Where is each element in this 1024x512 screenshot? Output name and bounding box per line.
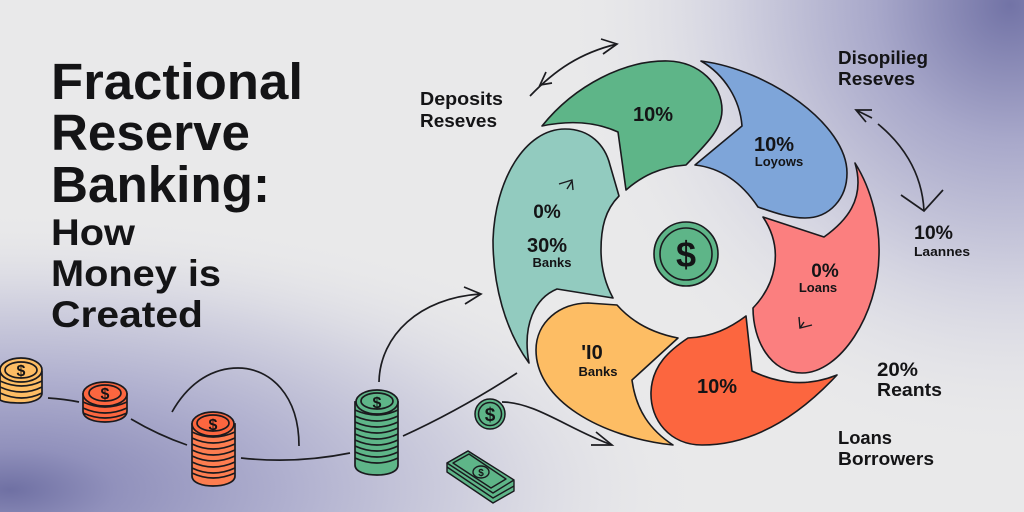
title: How bbox=[51, 212, 135, 253]
coin stack: yellow bbox=[0, 358, 42, 403]
segment: green bbox=[542, 61, 722, 190]
title bbox=[51, 53, 303, 335]
segment labels: 10% bbox=[754, 134, 794, 156]
outer labels: 10% bbox=[914, 223, 953, 244]
segment labels: 10% bbox=[633, 104, 673, 126]
title: Reserve bbox=[51, 104, 250, 161]
outer labels: Loans bbox=[838, 427, 892, 448]
coin stack: red small: $ bbox=[101, 386, 110, 403]
central dollar coin: $ bbox=[676, 234, 696, 275]
outer labels: Disopilieg bbox=[838, 47, 928, 68]
outer labels: 20% bbox=[877, 360, 918, 381]
arrow: top double-headed bbox=[530, 39, 617, 96]
segment labels: 10% bbox=[697, 376, 737, 398]
title: Money is bbox=[51, 253, 221, 294]
segment labels: Loans bbox=[799, 280, 837, 295]
title: Banking: bbox=[51, 156, 270, 213]
coin stack: yellow: $ bbox=[17, 363, 26, 380]
segment labels: 'I0 bbox=[581, 342, 603, 364]
small coin bbox=[475, 399, 505, 429]
wheel segments bbox=[493, 61, 879, 445]
cash stack bbox=[447, 451, 514, 503]
coin stack: green: $ bbox=[373, 395, 382, 412]
segment: yellow bbox=[536, 303, 678, 445]
segment: blue bbox=[695, 61, 847, 218]
arrow: right curved bbox=[856, 110, 943, 211]
segment labels: Banks bbox=[578, 364, 618, 379]
outer labels: Reseves bbox=[838, 68, 915, 89]
small arrows in segments bbox=[559, 180, 812, 328]
outer labels bbox=[420, 47, 970, 469]
central dollar coin bbox=[654, 222, 718, 286]
flow lines between coin stacks bbox=[48, 368, 517, 460]
arrow: stack to wheel bbox=[379, 287, 481, 382]
outer labels: Reants bbox=[877, 379, 942, 400]
segment: teal bbox=[493, 129, 619, 363]
title: Created bbox=[51, 294, 203, 335]
outer labels: Reseves bbox=[420, 110, 497, 131]
title: Fractional bbox=[51, 53, 303, 110]
coin stack: red small bbox=[83, 382, 127, 422]
segment labels: Banks bbox=[532, 255, 572, 270]
coin stack: green bbox=[355, 390, 398, 475]
cash stack: $ bbox=[478, 468, 484, 479]
segment labels: 0% bbox=[533, 202, 561, 223]
segment labels bbox=[527, 104, 839, 398]
small coin: $ bbox=[485, 405, 496, 426]
outer labels: Deposits bbox=[420, 88, 503, 109]
segment labels: Loyows bbox=[755, 154, 803, 169]
segment: orange-red bbox=[651, 316, 837, 445]
arrow: coin to wheel bottom bbox=[502, 402, 612, 445]
segment labels: 0% bbox=[811, 261, 839, 282]
outer labels: Laannes bbox=[914, 244, 970, 259]
coin stack: orange bbox=[192, 412, 235, 486]
segment labels: 30% bbox=[527, 235, 567, 257]
outer labels: Borrowers bbox=[838, 448, 934, 469]
segment: red bbox=[753, 163, 879, 373]
coin stack: orange: $ bbox=[209, 417, 218, 434]
